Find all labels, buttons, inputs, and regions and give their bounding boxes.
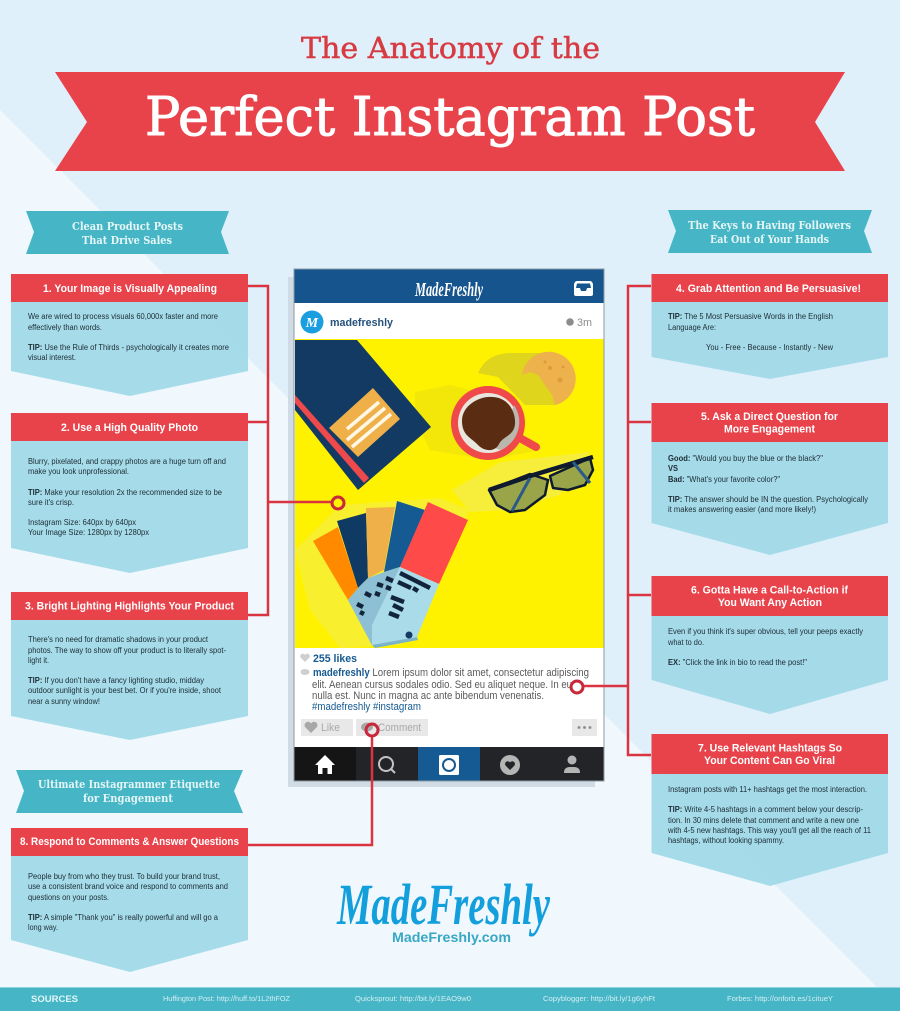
panel 6: call to action: You Want Any Action — [718, 597, 822, 609]
paint swatches — [313, 501, 468, 648]
panel 3: bright lighting — [11, 592, 248, 740]
logo: MadeFreshly — [336, 872, 550, 937]
sunglasses — [489, 457, 593, 512]
caption: nulla est. Nunc in magna ac ante bibendum venenatis. — [312, 690, 544, 702]
profile bar: 3m — [577, 317, 592, 329]
panel 8: respond to comments: 8. Respond to Comments & Answer Questions — [20, 836, 239, 848]
panel 5: direct question: Bad: "What's your favorite color?" — [668, 475, 780, 484]
section ribbon: etiquette: for Engagement — [83, 792, 174, 805]
panel 8: respond to comments: People buy from who they trust. To build your brand trust, — [28, 872, 220, 881]
panel 3: bright lighting: TIP: If you don't have a fancy lighting studio, midday — [28, 676, 204, 685]
profile bar — [300, 310, 592, 334]
panel 1: visually appealing: visual interest. — [28, 353, 76, 362]
panel 6: call to action: what to do. — [667, 638, 704, 647]
panel 6: call to action — [652, 576, 888, 714]
panel 5: direct question: Good: "Would you buy the blue or the black?" — [668, 454, 823, 463]
panel 8: respond to comments: questions on your posts. — [28, 893, 109, 902]
panel 4: grab attention: 4. Grab Attention and Be Persuasive! — [676, 283, 861, 295]
section ribbon: keys to followers: The Keys to Having Followers — [688, 219, 851, 232]
panel 5: direct question: it makes answering easier (and more likely!) — [668, 505, 816, 514]
panel 1: visually appealing: effectively than words. — [28, 323, 102, 332]
panel 5: direct question: VS — [668, 464, 679, 473]
coffee cup — [451, 386, 536, 460]
panel 3: bright lighting: near a sunny window! — [28, 697, 100, 706]
panel 5: direct question — [652, 403, 888, 555]
panel 1: visually appealing: 1. Your Image is Visually Appealing — [43, 283, 217, 295]
caption — [300, 667, 589, 713]
title line one: The Anatomy of the — [301, 31, 600, 65]
panel 8: respond to comments — [11, 828, 248, 972]
icon: avatar — [300, 310, 324, 334]
panel 8: respond to comments: long way. — [28, 923, 58, 932]
panel 2: high quality photo: Your Image Size: 1280px by 1280px — [28, 528, 149, 537]
app header — [294, 270, 604, 303]
panel 4: grab attention: You - Free - Because - Instantly - New — [706, 343, 833, 352]
section ribbon: clean product posts — [26, 211, 229, 254]
marker: image — [332, 497, 344, 509]
panel 5: direct question: TIP: The answer should be IN the question. Psychologically — [668, 495, 868, 504]
panel 2: high quality photo: Blurry, pixelated, and crappy photos are a huge turn off and — [28, 457, 226, 466]
panel 7: relevant hashtags: hashtags, without looking spammy. — [668, 836, 784, 845]
icon: avatar: M — [305, 316, 319, 331]
section ribbon: keys to followers — [668, 210, 872, 253]
panel 3: bright lighting: light it. — [28, 656, 49, 665]
section ribbon: etiquette — [16, 770, 243, 813]
panel 7: relevant hashtags — [652, 734, 888, 886]
bottom nav bar — [294, 747, 604, 780]
logo — [336, 872, 550, 945]
panel 3: bright lighting: 3. Bright Lighting Highlights Your Product — [25, 600, 234, 612]
sources footer: Copyblogger: http://bit.ly/1g6yhFt — [543, 994, 656, 1003]
panel 3: bright lighting: photos. The way to show off your product is to literally spot- — [28, 646, 226, 655]
caption: #madefreshly #instagram — [312, 701, 421, 713]
title — [55, 31, 845, 171]
logo: MadeFreshly.com — [392, 929, 511, 945]
panel 5: direct question: More Engagement — [724, 424, 815, 436]
profile bar: madefreshly — [330, 317, 394, 329]
panel 7: relevant hashtags: 7. Use Relevant Hashtags So — [698, 742, 842, 754]
title ribbon — [55, 72, 845, 171]
item shadows — [295, 353, 590, 648]
action buttons: Like — [321, 722, 340, 734]
panel 6: call to action: 6. Gotta Have a Call-to-Action if — [691, 584, 848, 596]
panel 7: relevant hashtags: TIP: Write 4-5 hashtags in a comment below your descrip- — [668, 805, 863, 814]
panel 4: grab attention: TIP: The 5 Most Persuasive Words in the English — [668, 312, 833, 321]
panel 7: relevant hashtags: with 4-5 new hashtags. This way you'll get all the reach of 11 — [667, 826, 872, 835]
phone shadow — [288, 277, 595, 787]
icon: profile — [564, 756, 580, 773]
panel 1: visually appealing: TIP: Use the Rule of Thirds - psychologically it creates more — [28, 343, 230, 352]
sources footer: Huffington Post: http://huff.to/1L2thFOZ — [163, 994, 290, 1003]
connector lines — [248, 286, 651, 845]
sources footer: Forbes: http://onforb.es/1citueY — [727, 994, 833, 1003]
cookie — [522, 352, 576, 405]
icon: home — [315, 755, 335, 774]
section ribbon: keys to followers: Eat Out of Your Hands — [710, 233, 829, 246]
marker: caption — [571, 681, 583, 693]
post photo — [295, 339, 604, 648]
panel 1: visually appealing — [11, 274, 248, 396]
icon: camera — [439, 755, 459, 775]
sources footer — [0, 987, 900, 1011]
panel 2: high quality photo: make you look unprofessional. — [28, 467, 129, 476]
panel 5: direct question: 5. Ask a Direct Question for — [701, 411, 839, 423]
panel 7: relevant hashtags: Instagram posts with 11+ hashtags get the most interaction. — [668, 785, 867, 794]
sources footer: SOURCES — [31, 994, 78, 1005]
panel 6: call to action: EX: "Click the link in bio to read the post!" — [668, 658, 807, 667]
likes: 255 likes — [313, 653, 357, 665]
panel 7: relevant hashtags: tion. In 30 mins delete that comment and write a new one — [668, 816, 860, 825]
panel 3: bright lighting: There's no need for dramatic shadows in your product — [28, 635, 209, 644]
icon: inbox — [574, 281, 593, 296]
panel 2: high quality photo — [11, 413, 248, 573]
icon: search — [379, 757, 395, 773]
caption: madefreshly Lorem ipsum dolor sit amet, consectetur adipiscing — [313, 667, 589, 679]
phone screen — [294, 269, 604, 781]
notebook — [295, 340, 431, 490]
section ribbon: clean product posts: Clean Product Posts — [72, 220, 183, 233]
panel 2: high quality photo: sure it's crisp. — [28, 498, 74, 507]
action buttons — [301, 719, 597, 736]
panel 2: high quality photo: 2. Use a High Quality Photo — [61, 422, 198, 434]
sources footer: Quicksprout: http://bit.ly/1EAO9w0 — [355, 994, 471, 1003]
action buttons: Comment — [378, 722, 421, 734]
section ribbon: etiquette: Ultimate Instagrammer Etiquette — [38, 778, 220, 791]
phone mockup — [288, 269, 604, 787]
app header: MadeFreshly — [414, 279, 483, 301]
section ribbon: clean product posts: That Drive Sales — [82, 234, 172, 247]
title line two: Perfect Instagram Post — [145, 87, 755, 148]
panel 4: grab attention: Language Are: — [668, 323, 716, 332]
panel 2: high quality photo: TIP: Make your resolution 2x the recommended size to be — [28, 488, 223, 497]
panel 2: high quality photo: Instagram Size: 640px by 640px — [28, 518, 136, 527]
panel 7: relevant hashtags: Your Content Can Go Viral — [704, 755, 835, 767]
panel 8: respond to comments: TIP: A simple "Thank you" is really powerful and will go a — [28, 913, 219, 922]
panel 3: bright lighting: outdoor sunlight is your best bet. Or if you're inside, shoot — [28, 686, 222, 695]
panel 6: call to action: Even if you think it's super obvious, tell your peeps exactly — [668, 627, 863, 636]
panel 1: visually appealing: We are wired to process visuals 60,000x faster and more — [28, 312, 219, 321]
panel 8: respond to comments: use a consistent brand voice and respond to comments and — [28, 882, 228, 891]
marker: comment — [366, 724, 378, 736]
caption: elit. Aenean cursus sodales odio. Sed eu aliquet neque. In eu — [312, 679, 572, 691]
panel 4: grab attention — [652, 274, 888, 379]
icon: activity — [500, 755, 520, 775]
